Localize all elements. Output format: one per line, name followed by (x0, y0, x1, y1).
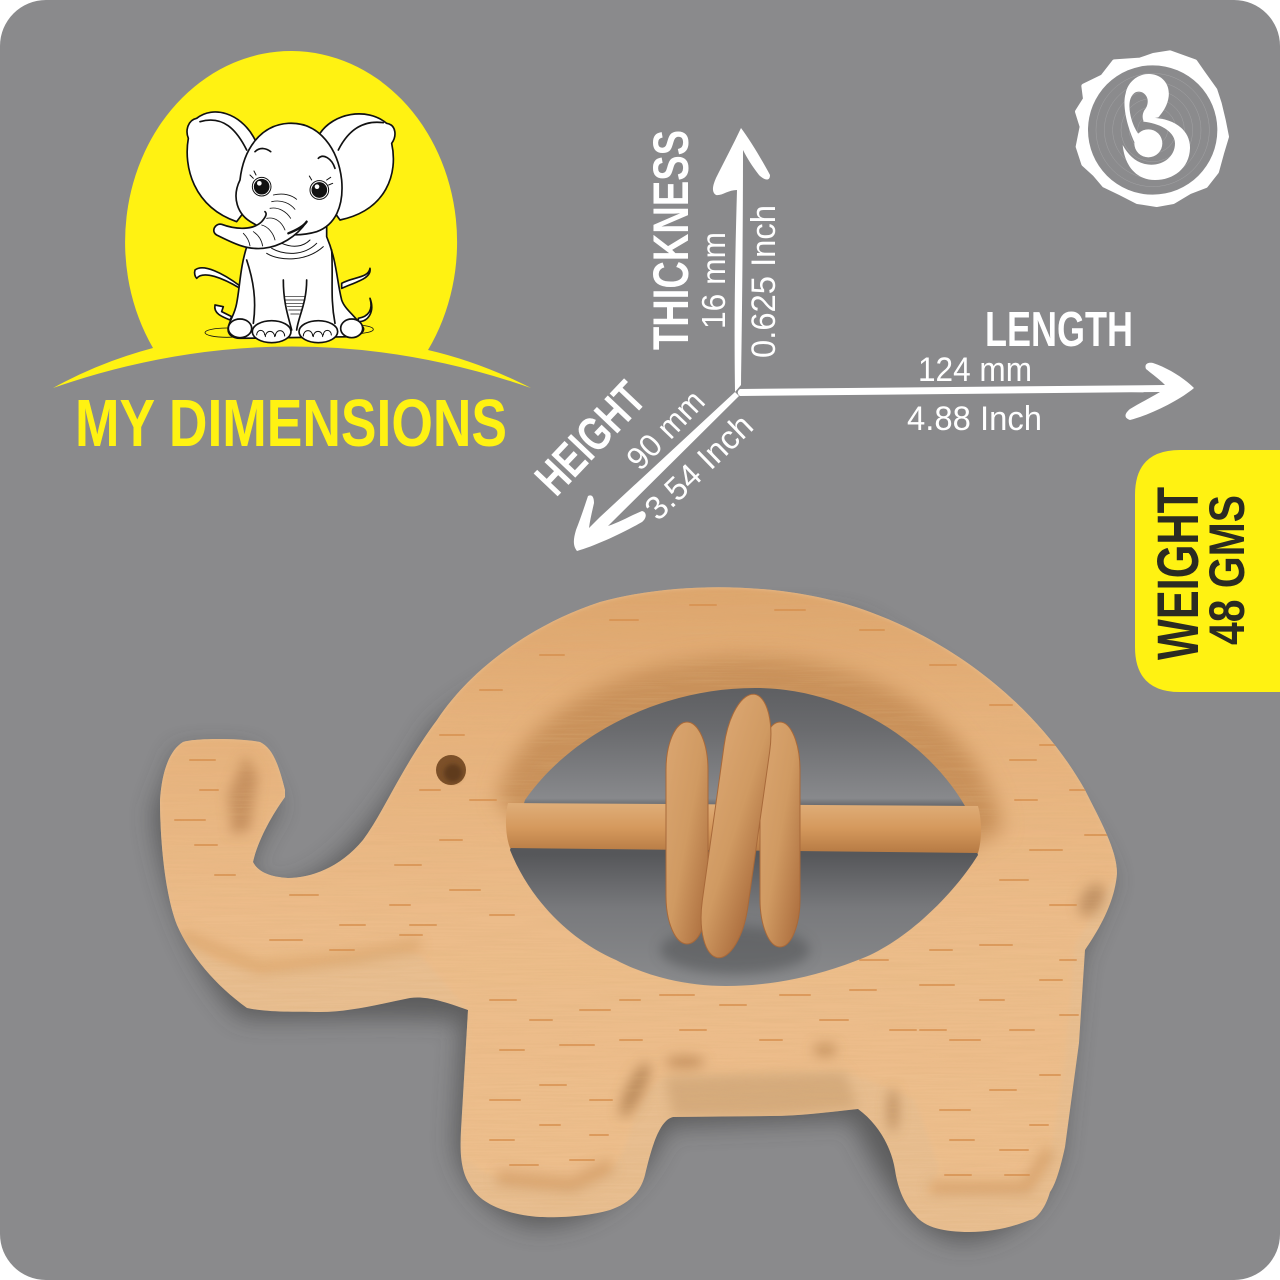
label: 124 mm: 124 mm (918, 351, 1032, 389)
label: 90 mm: 90 mm (619, 383, 712, 477)
middle disc (695, 691, 777, 961)
top face (160, 587, 1117, 1092)
brand logo badge (1077, 53, 1227, 205)
drop shadow (154, 613, 1111, 1242)
inner opening (510, 688, 978, 986)
arrow: height (down-left) (574, 392, 739, 551)
label: length: LENGTH (985, 303, 1133, 357)
disc shadows (660, 926, 810, 974)
weight tab (1135, 450, 1280, 692)
label: 48 gms: 48 GMS (1199, 495, 1255, 645)
icon: baby elephant (187, 112, 395, 343)
rod (506, 803, 981, 853)
logo group: yellow sun with baby elephant (53, 51, 531, 461)
white wood-slice edge (1077, 53, 1227, 205)
label: 4.88 inch: 4.88 Inch (907, 400, 1042, 438)
label: thickness: THICKNESS (643, 130, 699, 350)
side face (140, 570, 1140, 1250)
inner wall shading (497, 655, 1003, 850)
label: 3.54 inch: 3.54 Inch (637, 407, 760, 527)
product photo: wooden elephant rattle (140, 570, 1140, 1250)
wooden body (140, 570, 1140, 1250)
right disc (760, 722, 800, 947)
left disc (666, 722, 708, 944)
yellow sun and hill arc (53, 51, 531, 388)
shading on wood (180, 755, 1111, 1188)
fine grain texture (696, 680, 916, 746)
yellow tab (1135, 450, 1280, 692)
wood grain (175, 605, 1107, 1175)
arrow: length (right) (738, 363, 1194, 420)
label: weight: WEIGHT (1146, 487, 1211, 660)
label: 16 mm: 16 mm (695, 232, 732, 329)
dimension diagram (526, 128, 1194, 551)
label: height: HEIGHT (526, 372, 656, 506)
arrow: thickness (up) (713, 128, 770, 392)
label: 0.625 inch: 0.625 Inch (745, 205, 783, 358)
eye hole (436, 755, 466, 785)
heading: my dimensions: MY DIMENSIONS (75, 386, 507, 461)
